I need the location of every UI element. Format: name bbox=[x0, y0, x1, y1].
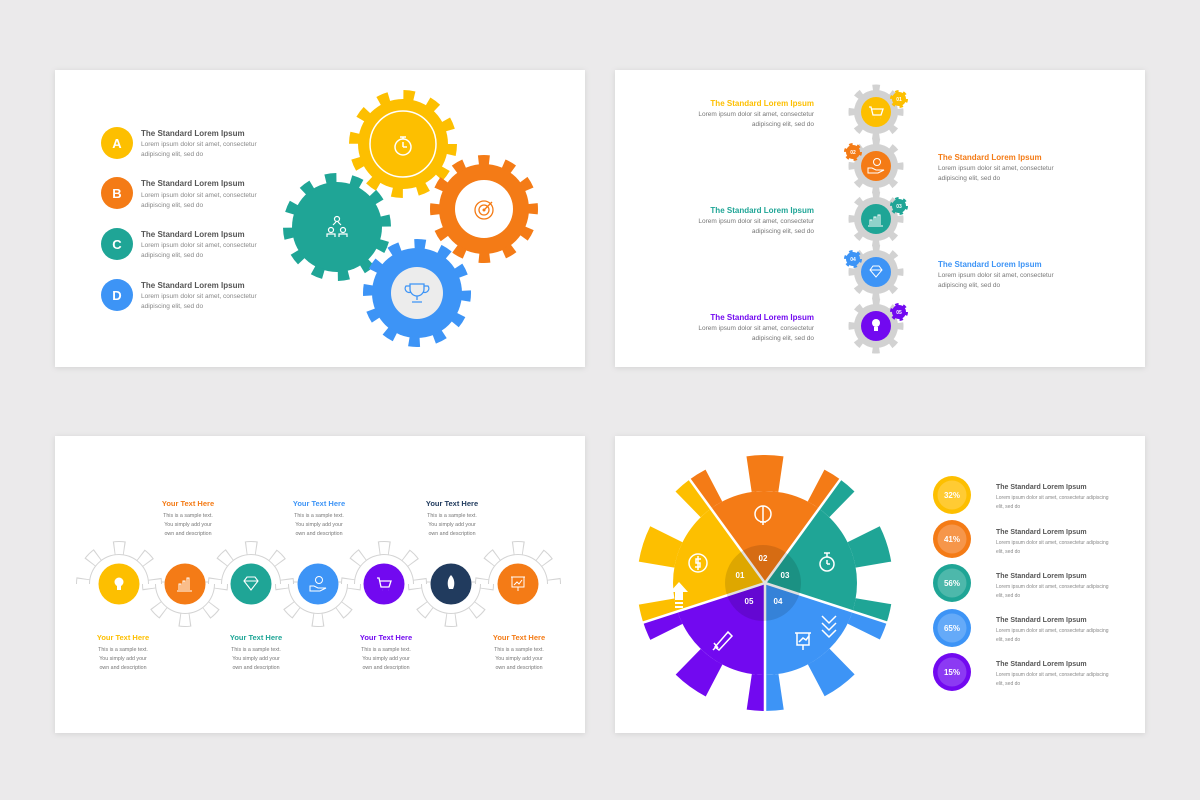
text top: blue: Your Text Here bbox=[293, 499, 345, 508]
text top: blue: own and description bbox=[295, 531, 343, 537]
list 41% bbox=[933, 520, 1109, 558]
list item C: C bbox=[112, 237, 122, 252]
text bottom: orange: You simply add your bbox=[495, 656, 543, 662]
gear step 05 bbox=[852, 302, 906, 350]
segmented gear chart: 02 bbox=[759, 554, 768, 563]
text bottom: purple bbox=[360, 633, 412, 671]
text 04 bbox=[938, 260, 1054, 289]
list 15%: The Standard Lorem Ipsum bbox=[996, 661, 1087, 668]
list 65%: Lorem ipsum dolor sit amet, consectetur adipiscing bbox=[996, 628, 1109, 634]
list item B: B bbox=[112, 186, 122, 201]
gear step 04 bbox=[846, 248, 900, 296]
text 01: Lorem ipsum dolor sit amet, consectetur bbox=[698, 111, 815, 118]
list 65% bbox=[933, 609, 1109, 647]
text bottom: teal: Your Text Here bbox=[230, 633, 282, 642]
text bottom: orange: This is a sample text. bbox=[494, 647, 544, 653]
list 15%: Lorem ipsum dolor sit amet, consectetur adipiscing bbox=[996, 672, 1109, 678]
list item B bbox=[101, 177, 257, 209]
text bottom: purple: You simply add your bbox=[362, 656, 410, 662]
text bottom: purple: Your Text Here bbox=[360, 633, 412, 642]
text 05: Lorem ipsum dolor sit amet, consectetur bbox=[698, 325, 815, 332]
gear: blue bbox=[368, 244, 466, 342]
text bottom: purple: own and description bbox=[362, 665, 410, 671]
text top: navy: This is a sample text. bbox=[427, 513, 477, 519]
list item A: The Standard Lorem Ipsum bbox=[141, 129, 245, 138]
panel: segmented gear bbox=[615, 436, 1145, 733]
text bottom: yellow: You simply add your bbox=[99, 656, 147, 662]
gear step 05: 05 bbox=[896, 310, 902, 316]
gear: teal bbox=[288, 178, 386, 276]
list 56%: 56% bbox=[944, 579, 960, 588]
list 41%: 41% bbox=[944, 535, 960, 544]
text 02 bbox=[938, 153, 1054, 182]
list 32%: elit, sed do bbox=[996, 504, 1020, 510]
text bottom: teal: You simply add your bbox=[232, 656, 280, 662]
panel: vertical gears bbox=[615, 70, 1145, 367]
text top: navy: own and description bbox=[428, 531, 476, 537]
gear step 02: 02 bbox=[850, 150, 856, 156]
text top: navy: You simply add your bbox=[428, 522, 476, 528]
list 65%: The Standard Lorem Ipsum bbox=[996, 617, 1087, 624]
list item A bbox=[101, 127, 257, 159]
list item C bbox=[101, 228, 257, 260]
list 56% bbox=[933, 564, 1109, 602]
text top: orange: This is a sample text. bbox=[163, 513, 213, 519]
list item B: Lorem ipsum dolor sit amet, consectetur bbox=[141, 192, 257, 199]
text bottom: orange: Your Text Here bbox=[493, 633, 545, 642]
text top: orange: Your Text Here bbox=[162, 499, 214, 508]
panel: gear timeline bbox=[55, 436, 585, 733]
segmented gear chart: 03 bbox=[781, 571, 790, 580]
list 41%: elit, sed do bbox=[996, 549, 1020, 555]
list 56%: The Standard Lorem Ipsum bbox=[996, 573, 1087, 580]
list 32%: Lorem ipsum dolor sit amet, consectetur adipiscing bbox=[996, 495, 1109, 501]
text 01: The Standard Lorem Ipsum bbox=[710, 99, 814, 108]
text top: blue bbox=[293, 499, 345, 537]
text top: blue: You simply add your bbox=[295, 522, 343, 528]
icons bbox=[689, 506, 836, 650]
list 41%: Lorem ipsum dolor sit amet, consectetur adipiscing bbox=[996, 540, 1109, 546]
gear outlines bbox=[79, 548, 561, 620]
gear: orange bbox=[435, 160, 533, 258]
list 56%: elit, sed do bbox=[996, 593, 1020, 599]
segmented gear chart: 01 bbox=[736, 571, 745, 580]
list item C: The Standard Lorem Ipsum bbox=[141, 230, 245, 239]
text 04: The Standard Lorem Ipsum bbox=[938, 260, 1042, 269]
list item A: Lorem ipsum dolor sit amet, consectetur bbox=[141, 141, 257, 148]
gear: yellow bbox=[354, 95, 452, 193]
list 15%: elit, sed do bbox=[996, 681, 1020, 687]
text 03 bbox=[698, 206, 815, 235]
text 05: adipiscing elit, sed do bbox=[752, 335, 814, 342]
text bottom: teal bbox=[230, 633, 282, 671]
list 56%: Lorem ipsum dolor sit amet, consectetur adipiscing bbox=[996, 584, 1109, 590]
text bottom: orange bbox=[493, 633, 545, 671]
text 03: Lorem ipsum dolor sit amet, consectetur bbox=[698, 218, 815, 225]
list item A: adipiscing elit, sed do bbox=[141, 151, 204, 158]
text 04: adipiscing elit, sed do bbox=[938, 282, 1001, 289]
text top: blue: This is a sample text. bbox=[294, 513, 344, 519]
list item D: The Standard Lorem Ipsum bbox=[141, 281, 245, 290]
list 41%: The Standard Lorem Ipsum bbox=[996, 529, 1087, 536]
text 02: Lorem ipsum dolor sit amet, consectetur bbox=[938, 165, 1054, 172]
text bottom: yellow: Your Text Here bbox=[97, 633, 149, 642]
text 01 bbox=[698, 99, 815, 128]
list 15%: 15% bbox=[944, 668, 960, 677]
list item D: D bbox=[112, 288, 122, 303]
gear step 03: 03 bbox=[896, 204, 902, 210]
text bottom: yellow: own and description bbox=[99, 665, 147, 671]
text bottom: yellow bbox=[97, 633, 149, 671]
text top: orange bbox=[162, 499, 214, 537]
text bottom: teal: This is a sample text. bbox=[231, 647, 281, 653]
text 03: The Standard Lorem Ipsum bbox=[710, 206, 814, 215]
gear step 03 bbox=[852, 195, 906, 243]
segmented gear chart: 04 bbox=[774, 597, 783, 606]
text 05: The Standard Lorem Ipsum bbox=[710, 313, 814, 322]
text top: navy bbox=[426, 499, 478, 537]
text 05 bbox=[698, 313, 815, 342]
text 02: adipiscing elit, sed do bbox=[938, 175, 1001, 182]
text top: orange: You simply add your bbox=[164, 522, 212, 528]
text bottom: teal: own and description bbox=[232, 665, 280, 671]
text 01: adipiscing elit, sed do bbox=[752, 121, 814, 128]
gear step 02 bbox=[846, 142, 900, 190]
gear step 04: 04 bbox=[850, 257, 856, 263]
list item D: Lorem ipsum dolor sit amet, consectetur bbox=[141, 293, 257, 300]
text bottom: yellow: This is a sample text. bbox=[98, 647, 148, 653]
list item C: Lorem ipsum dolor sit amet, consectetur bbox=[141, 242, 257, 249]
list item C: adipiscing elit, sed do bbox=[141, 252, 204, 259]
list item D: adipiscing elit, sed do bbox=[141, 303, 204, 310]
text 04: Lorem ipsum dolor sit amet, consectetur bbox=[938, 272, 1054, 279]
list item D bbox=[101, 279, 257, 311]
text bottom: purple: This is a sample text. bbox=[361, 647, 411, 653]
gear step 01 bbox=[852, 88, 906, 136]
text 03: adipiscing elit, sed do bbox=[752, 228, 814, 235]
segmented gear chart: 05 bbox=[745, 597, 754, 606]
gear step 01: 01 bbox=[896, 97, 902, 103]
list 15% bbox=[933, 653, 1109, 691]
text 02: The Standard Lorem Ipsum bbox=[938, 153, 1042, 162]
list item A: A bbox=[112, 136, 122, 151]
list 32%: The Standard Lorem Ipsum bbox=[996, 484, 1087, 491]
list 32%: 32% bbox=[944, 491, 960, 500]
list 65%: 65% bbox=[944, 624, 960, 633]
timeline circles with icons bbox=[98, 564, 538, 604]
text bottom: orange: own and description bbox=[495, 665, 543, 671]
text top: orange: own and description bbox=[164, 531, 212, 537]
text top: navy: Your Text Here bbox=[426, 499, 478, 508]
list 65%: elit, sed do bbox=[996, 637, 1020, 643]
list 32% bbox=[933, 476, 1109, 514]
list item B: adipiscing elit, sed do bbox=[141, 202, 204, 209]
list item B: The Standard Lorem Ipsum bbox=[141, 179, 245, 188]
segmented gear chart bbox=[637, 473, 893, 718]
panel: gear cluster bbox=[55, 70, 585, 367]
